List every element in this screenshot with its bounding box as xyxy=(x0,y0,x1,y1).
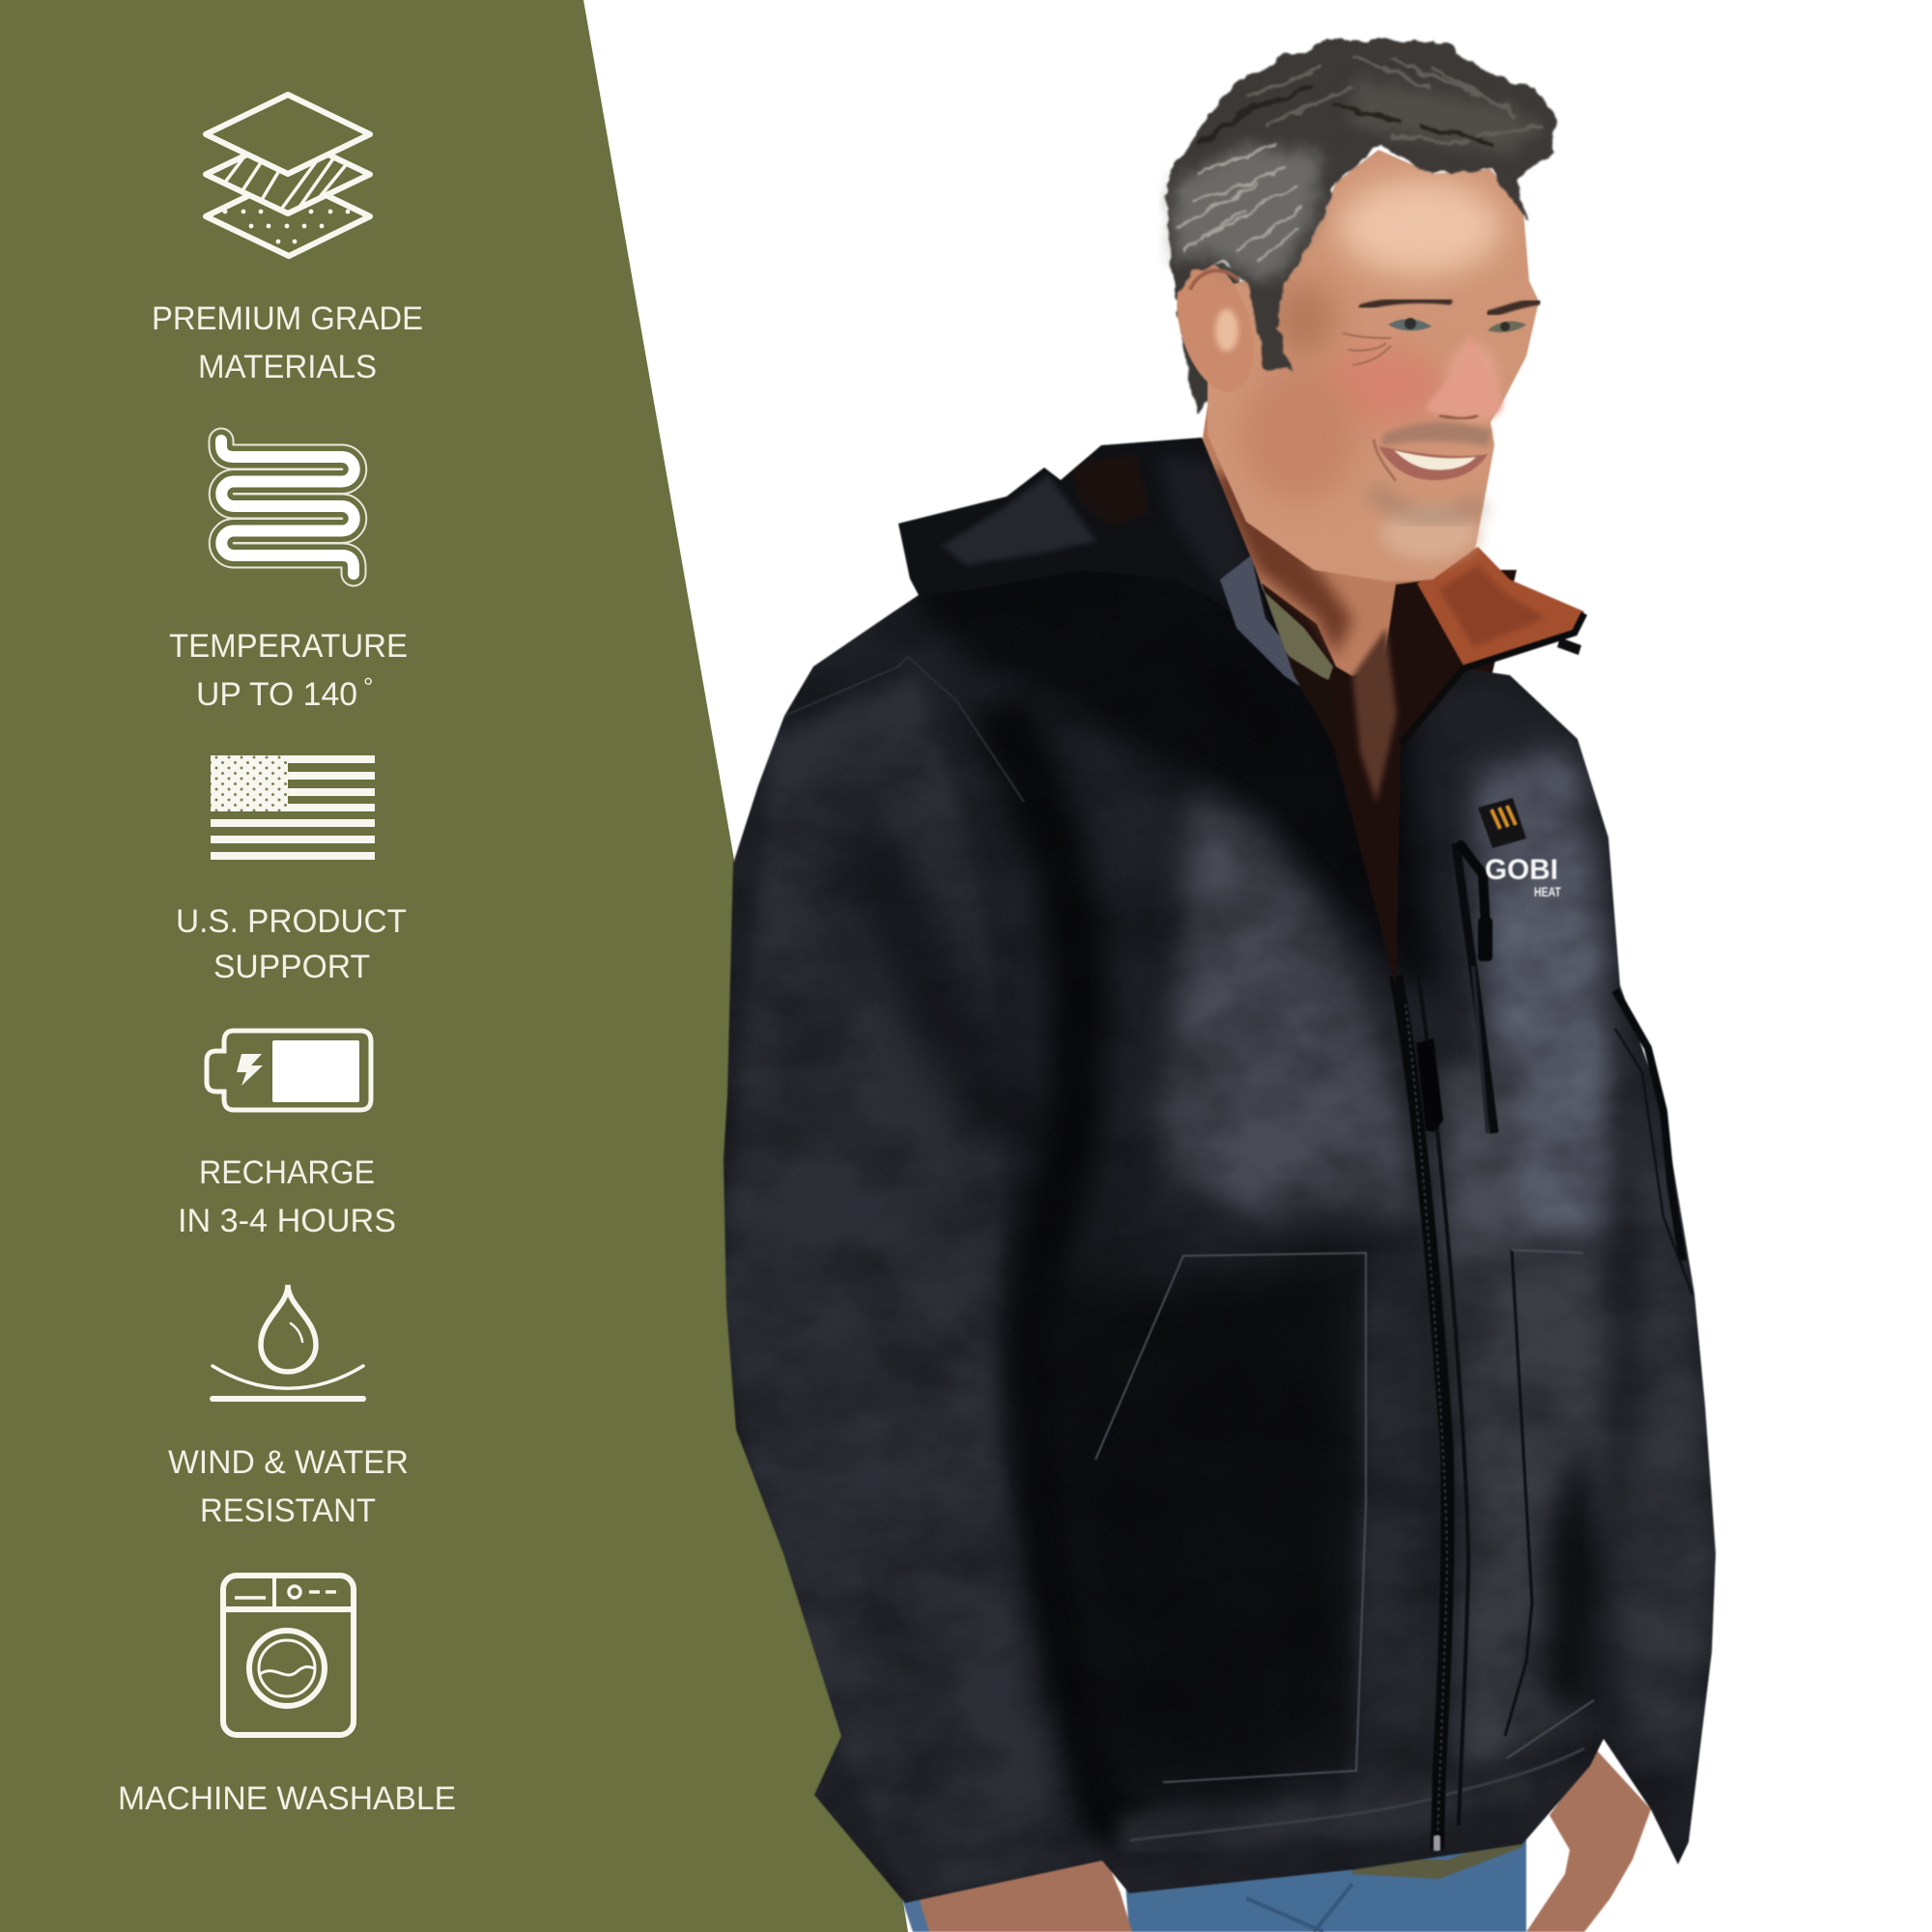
heading: recharge: IN 3-4 HOURS xyxy=(178,1203,396,1239)
heading: recharge xyxy=(178,1154,396,1239)
inner placket xyxy=(1219,556,1300,687)
crow's feet xyxy=(1343,333,1391,365)
neck shadow xyxy=(1208,473,1352,657)
heading: temperature: UP TO 140 xyxy=(196,676,357,713)
heading: temperature: ° xyxy=(363,672,373,701)
stitched pocket right xyxy=(1505,1250,1532,1736)
fabric grain xyxy=(676,386,1758,1932)
heading: temperature xyxy=(169,628,408,713)
jeans xyxy=(898,1835,1526,1932)
heading: recharge: RECHARGE xyxy=(199,1154,375,1191)
sleeve pocket line xyxy=(1615,1029,1692,1294)
heading: wind and water: RESISTANT xyxy=(200,1492,376,1529)
icon: american flag xyxy=(211,755,375,860)
moustache shadow xyxy=(1381,422,1492,446)
logo text: HEAT xyxy=(1534,884,1561,899)
neck xyxy=(1201,406,1485,676)
shirt base xyxy=(1246,541,1517,1005)
hair xyxy=(1167,40,1555,370)
hem band seam xyxy=(1130,1748,1584,1840)
icon: water drop xyxy=(213,1285,363,1399)
heading: product support: SUPPORT xyxy=(213,949,370,985)
placket seam xyxy=(1418,976,1468,1826)
lighting: sleeve left xyxy=(720,676,1102,1898)
fabric mottling xyxy=(724,616,1712,1897)
photo: man wearing heated jacket xyxy=(676,40,1758,1932)
lighting: hem xyxy=(1121,1777,1526,1835)
lighting: right torso xyxy=(1459,1246,1613,1787)
panel: green feature band xyxy=(0,0,908,1932)
heading: premium grade materials xyxy=(152,300,423,385)
lighting: fold between sleeve and chest xyxy=(995,705,1111,1835)
heading: wind and water: WIND & WATER xyxy=(168,1444,409,1481)
main zipper end xyxy=(1434,1835,1440,1851)
heading: product support: U.S. PRODUCT xyxy=(176,903,407,940)
main zipper pull xyxy=(1416,1038,1443,1132)
face xyxy=(1208,150,1539,582)
eyes xyxy=(1388,318,1526,332)
sleeve zipper xyxy=(1615,990,1683,1261)
brows xyxy=(1362,299,1538,314)
lighting: chest xyxy=(1159,792,1415,1217)
hatching xyxy=(218,145,362,217)
icon: washing machine xyxy=(223,1576,354,1735)
icon: layered materials xyxy=(206,95,370,256)
heading: premium grade materials: MATERIALS xyxy=(198,349,377,385)
main zipper xyxy=(1396,976,1448,1849)
mouth xyxy=(1374,440,1488,481)
heading: temperature: TEMPERATURE xyxy=(169,628,408,665)
lighting: right sleeve xyxy=(1613,1005,1715,1787)
hood xyxy=(898,438,1275,638)
lighting: pocket and torso dark xyxy=(1064,1256,1362,1806)
hand: left xyxy=(918,1850,1132,1932)
chest zipper xyxy=(1456,843,1494,1133)
shirt details xyxy=(1253,582,1397,802)
lining at hem xyxy=(1352,1831,1522,1879)
heading: product support xyxy=(176,903,407,985)
nose xyxy=(1425,333,1502,419)
back of hair xyxy=(1171,253,1241,412)
heat control patch xyxy=(1478,798,1526,848)
icon: battery charging xyxy=(207,1031,371,1110)
stitched pocket left xyxy=(1095,1253,1366,1782)
lighting: upper shadow xyxy=(912,570,1441,994)
shoulder seam xyxy=(784,657,1024,802)
jacket body xyxy=(723,437,1717,1904)
logo text: GOBI xyxy=(1485,854,1558,886)
ear xyxy=(1163,252,1267,401)
heading: machine washable: MACHINE WASHABLE xyxy=(118,1780,456,1817)
face shading xyxy=(1241,179,1502,560)
collar xyxy=(1401,547,1584,744)
logo text xyxy=(1485,854,1561,899)
heading: wind and water xyxy=(168,1444,409,1529)
heading: premium grade materials: PREMIUM GRADE xyxy=(152,300,423,337)
dots xyxy=(223,210,350,243)
icon: heating coil xyxy=(221,440,355,574)
hand: right xyxy=(1526,1750,1651,1932)
